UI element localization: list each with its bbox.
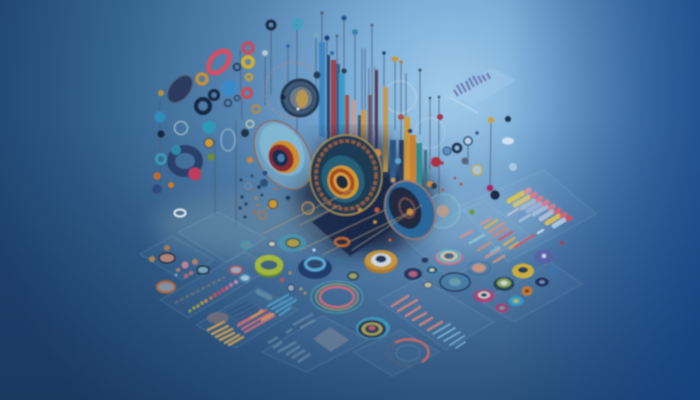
stem tips [313,12,440,164]
dark mass at base of bars [312,135,425,256]
ring: lime [255,258,283,278]
panel: lower right chart [392,296,465,348]
top dark target [280,80,318,116]
dotted line [175,277,238,313]
panel: grey text lines and hatch [268,314,349,362]
top right bar chart [449,68,516,113]
ring: teal yellow target [356,317,390,339]
ring: concentric pink target [311,281,363,313]
panel: colourful top right bars [509,190,570,226]
stems with tip dots [160,13,491,225]
translucent isometric panels [140,170,596,376]
panel: bar groups [207,292,296,345]
left floating rings [152,20,301,216]
background target circles [265,62,460,228]
scattered particles [238,114,517,242]
pink ring [204,47,234,77]
diagonal streaks [262,190,422,255]
ring: red arc target [388,339,429,365]
big navy ring [171,149,199,173]
panel: multi-colour bars [461,209,543,262]
large target centre [310,135,382,215]
lower left rings [149,245,250,292]
ring: blue on navy [298,257,332,279]
large target right [376,173,444,247]
dark disc [162,70,198,108]
lower right rings [364,241,564,313]
vertical bars cluster [319,42,427,200]
lower rings and panels group [149,190,570,365]
small centre rings [241,234,358,295]
large target left [242,110,324,200]
blue disc [221,80,237,96]
